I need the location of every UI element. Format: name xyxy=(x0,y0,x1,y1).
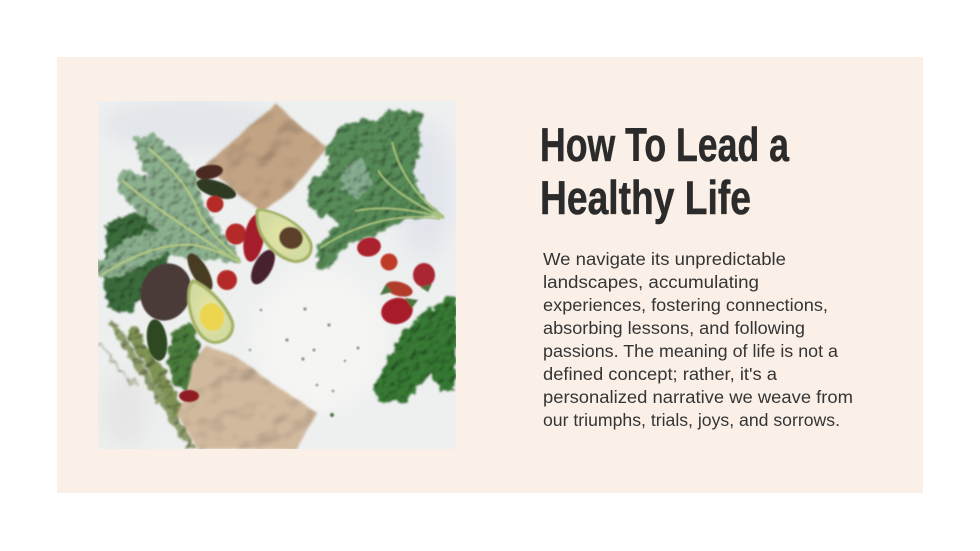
title: Healthy Life xyxy=(540,171,751,224)
body paragraph: our triumphs, trials, joys, and sorrows. xyxy=(543,410,840,430)
curly kale leaf, top left xyxy=(98,134,242,276)
title xyxy=(540,118,790,224)
bottom-right kale xyxy=(372,296,456,402)
body paragraph: passions. The meaning of life is not a xyxy=(543,341,838,361)
marble surface xyxy=(98,99,456,450)
top paper bag xyxy=(205,103,327,212)
title: How To Lead a xyxy=(540,118,790,171)
body paragraph: experiences, fostering connections, xyxy=(543,295,828,315)
body paragraph: absorbing lessons, and following xyxy=(543,318,805,338)
right curly kale xyxy=(306,110,444,270)
dark kale, left xyxy=(102,208,172,312)
body paragraph: defined concept; rather, it's a xyxy=(543,364,777,384)
body paragraph: personalized narrative we weave from xyxy=(543,387,853,407)
body paragraph: We navigate its unpredictable xyxy=(543,249,786,269)
bottom paper bag xyxy=(176,346,316,449)
strawberries xyxy=(355,235,435,328)
body paragraph: landscapes, accumulating xyxy=(543,272,759,292)
thyme sprig xyxy=(101,325,190,444)
photo: vegetables on marble xyxy=(98,99,456,450)
tomatoes xyxy=(179,196,398,402)
chili peppers xyxy=(144,213,280,362)
background panel xyxy=(57,57,923,493)
avocado half, lower xyxy=(187,279,234,344)
small parsley xyxy=(168,323,200,390)
body paragraph xyxy=(543,249,853,430)
avocado half, upper with pit xyxy=(255,208,313,263)
marble speckles xyxy=(235,307,360,417)
whole avocado xyxy=(140,262,191,322)
bag opening and dark pepper xyxy=(194,164,238,200)
